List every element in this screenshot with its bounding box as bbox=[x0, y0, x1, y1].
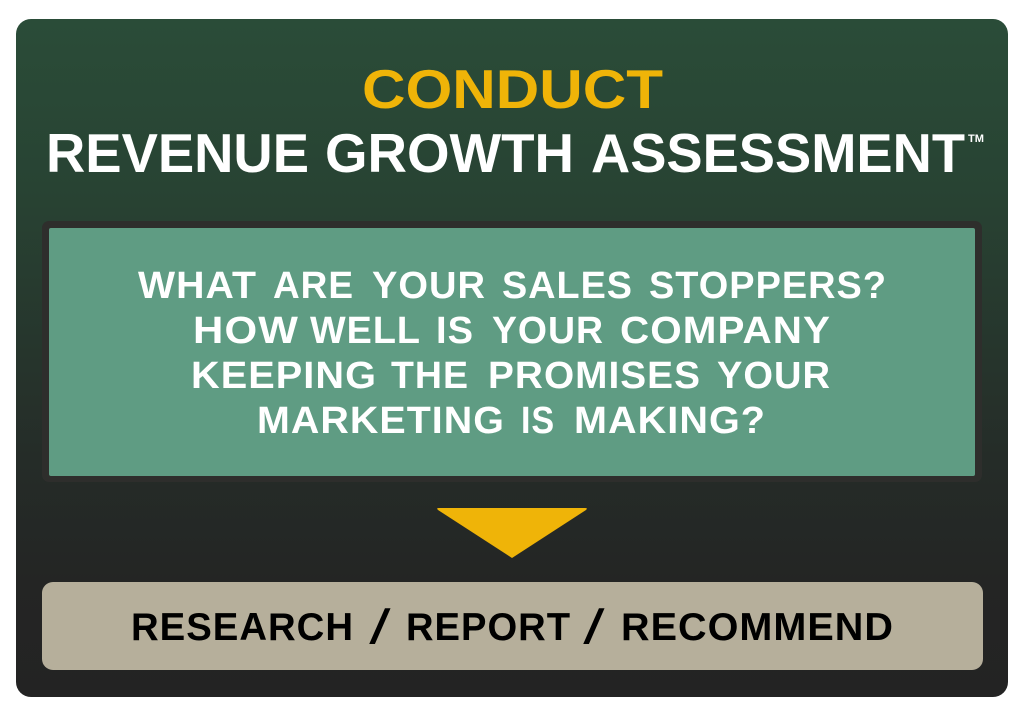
question text: WHAT bbox=[138, 265, 257, 307]
heading: revenue growth assessment: GROWTH bbox=[325, 122, 574, 184]
bar text: RECOMMEND bbox=[621, 606, 894, 649]
bar bbox=[42, 582, 983, 670]
question text: HOW bbox=[193, 310, 299, 352]
question text: COMPANY bbox=[620, 310, 831, 352]
bar text: / bbox=[366, 601, 393, 654]
question text: KEEPING bbox=[191, 355, 377, 397]
bar text: REPORT bbox=[406, 606, 571, 649]
question text: IS bbox=[436, 310, 474, 352]
question text: IS bbox=[521, 400, 555, 442]
question text bbox=[138, 265, 887, 442]
panel border bbox=[42, 221, 982, 482]
question text: ARE bbox=[273, 265, 354, 307]
bar text: / bbox=[580, 601, 607, 654]
bar text: RESEARCH bbox=[131, 606, 354, 649]
heading: revenue growth assessment: ASSESSMENT bbox=[591, 122, 965, 184]
trademark mark: TM bbox=[968, 133, 984, 145]
question text: YOUR bbox=[372, 265, 486, 307]
panel: research report recommend bbox=[42, 582, 983, 670]
arrow: down bbox=[437, 508, 587, 558]
question text: YOUR bbox=[717, 355, 831, 397]
heading: revenue growth assessment: REVENUE bbox=[46, 122, 309, 184]
question text: SALES bbox=[502, 265, 633, 307]
question text: PROMISES bbox=[488, 355, 701, 397]
question text: YOUR bbox=[492, 310, 604, 352]
heading: revenue growth assessment bbox=[46, 122, 965, 184]
bar text bbox=[131, 601, 894, 654]
question text: THE bbox=[391, 355, 469, 397]
question text: STOPPERS? bbox=[649, 265, 887, 307]
panel: questions bbox=[42, 221, 982, 482]
panel fill bbox=[49, 228, 975, 476]
heading: conduct: CONDUCT bbox=[362, 58, 663, 120]
question text: MAKING? bbox=[574, 400, 766, 442]
question text: WELL bbox=[310, 310, 421, 352]
question text: MARKETING bbox=[257, 400, 505, 442]
